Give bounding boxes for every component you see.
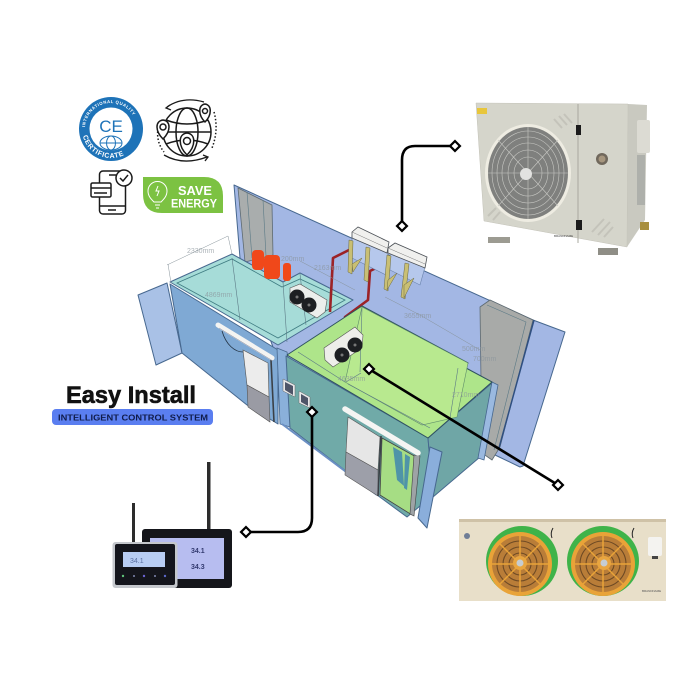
left room front wall — [170, 284, 278, 424]
right room base strip — [282, 424, 377, 495]
evaporator unit photo: BRANDNAME — [642, 589, 661, 593]
subheading pill: intelligent control system: INTELLIGENT CONTROL SYSTEM — [58, 412, 208, 422]
back wall — [234, 185, 565, 467]
panel: cold room diagram — [138, 185, 565, 528]
large wireless touchscreen controller: 34.1 — [191, 548, 205, 555]
left door — [218, 325, 274, 422]
connector: condenser to wall units — [397, 141, 460, 231]
left gray column — [238, 188, 273, 262]
icon: CE certificate badge: INTERNATIONAL QUALITY — [82, 100, 136, 127]
orange tanks — [252, 250, 291, 281]
dimension labels: 3655mm — [404, 313, 431, 320]
dimension labels: 2330mm — [187, 248, 214, 255]
evaporator unit photo — [459, 519, 666, 601]
dimension labels — [187, 248, 497, 399]
heading: Easy Install: Easy Install — [66, 382, 196, 409]
connector: controller to control box — [241, 407, 317, 537]
icon: global locations — [157, 100, 216, 161]
outdoor condensing unit photo: BRANDNAME — [554, 234, 573, 238]
icon: save energy badge — [143, 177, 223, 213]
right evaporator unit — [324, 327, 363, 367]
dimension labels: 4635mm — [338, 376, 365, 383]
icon: CE certificate badge: CE — [99, 117, 123, 136]
icon: save energy badge: ENERGY — [171, 196, 217, 210]
dimension labels: 2710mm — [452, 392, 479, 399]
icon: save energy badge: SAVE — [178, 184, 212, 198]
small wireless controller — [112, 503, 178, 588]
subheading pill: intelligent control system — [52, 409, 213, 425]
left room door leaf — [138, 283, 182, 365]
icon: CE certificate badge: CERTIFICATE — [83, 135, 124, 158]
wall-mounted condensing units — [348, 227, 427, 299]
large wireless touchscreen controller: 34.3 — [191, 564, 205, 571]
right side post — [478, 382, 498, 460]
dimension labels: 700mm — [473, 356, 497, 363]
right room side wall — [428, 383, 492, 497]
dimension labels: 2163mm — [314, 265, 341, 272]
dimension labels: 4869mm — [205, 292, 232, 299]
left room right post — [277, 348, 300, 430]
left evaporator unit — [290, 284, 327, 318]
left room top — [170, 254, 353, 345]
icon: CE certificate badge — [79, 97, 143, 161]
dimension labels: 200mm — [281, 256, 305, 263]
connector: evaporator to cold room — [364, 364, 563, 490]
large wireless touchscreen controller — [142, 462, 232, 588]
right door — [345, 409, 420, 516]
right room front door leaf — [418, 447, 442, 528]
dimension lines — [167, 236, 480, 350]
icon: phone with check — [91, 170, 132, 214]
dimension labels: 500mm — [462, 346, 486, 353]
control boxes — [283, 379, 310, 408]
right room front wall — [286, 356, 433, 517]
outdoor condensing unit photo — [476, 103, 650, 255]
small wireless controller: 34.1 — [130, 558, 144, 565]
red refrigerant pipes — [330, 250, 382, 332]
right room top — [287, 306, 492, 438]
right gray column — [480, 300, 534, 460]
